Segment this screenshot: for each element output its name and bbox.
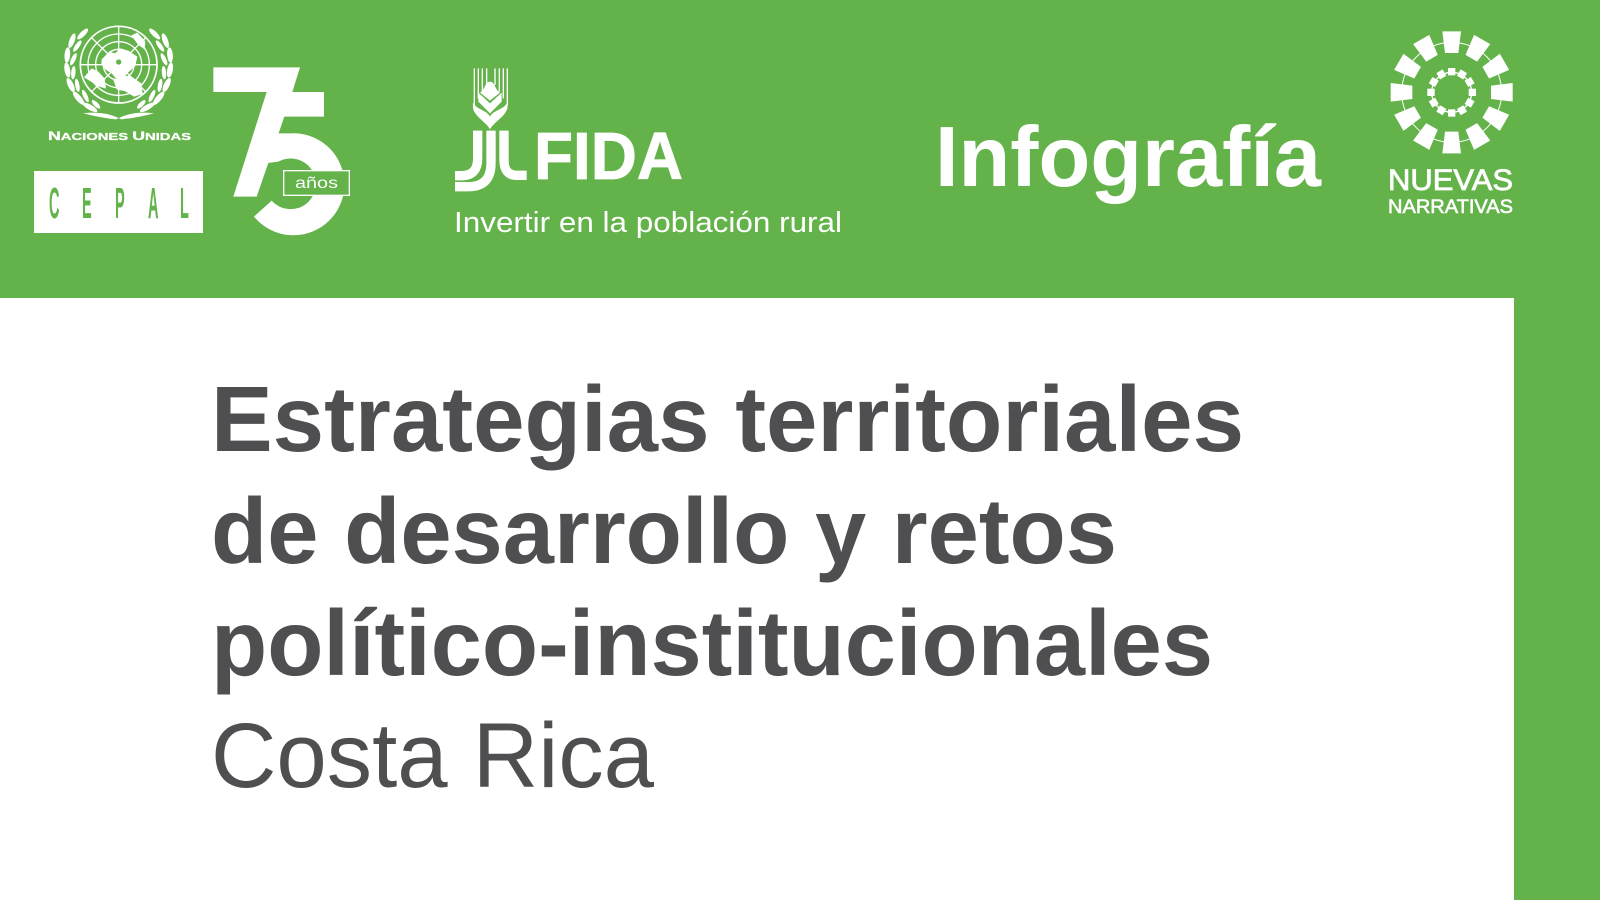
icon: numeral five bowl bbox=[254, 133, 344, 235]
icon: left olive branch bbox=[63, 27, 102, 114]
icon: JJL strokes bbox=[455, 131, 527, 187]
logo: FIDA bbox=[454, 68, 842, 239]
icon: wreath ribbon bbox=[83, 113, 154, 123]
text: NARRATIVAS: NARRATIVAS bbox=[1388, 196, 1513, 218]
text: NUEVAS: NUEVAS bbox=[1388, 164, 1513, 197]
logo: CEPAL bbox=[34, 171, 203, 233]
icon: wheat chevrons bbox=[473, 93, 508, 129]
text: años: años bbox=[295, 175, 338, 192]
title block bbox=[211, 367, 1244, 807]
subtitle: country: Costa Rica bbox=[211, 705, 655, 807]
icon: Nuevas Narrativas ring bbox=[1391, 31, 1513, 153]
label box: años bbox=[284, 171, 349, 195]
icon: wheat awns bbox=[474, 68, 507, 105]
title line 1: Estrategias territoriales bbox=[211, 367, 1244, 471]
icon: world continents bbox=[84, 33, 145, 97]
icon: globe rings bbox=[80, 26, 157, 103]
logo: Nuevas Narrativas bbox=[1388, 31, 1513, 218]
heading: Infografía: Infografía bbox=[935, 110, 1322, 205]
text: tagline: Invertir en la población rural bbox=[454, 207, 842, 239]
title line 3: político-institucionales bbox=[211, 591, 1213, 695]
icon: wheat and JJL mark bbox=[455, 68, 527, 187]
icon: wheat grain bbox=[480, 82, 500, 101]
logo: 75 años bbox=[213, 67, 349, 235]
text: FIDA: FIDA bbox=[534, 119, 683, 194]
text: Naciones Unidas: N ACIONES U NIDAS bbox=[48, 129, 191, 143]
logo: Naciones Unidas emblem bbox=[63, 26, 174, 123]
icon: globe centre bbox=[116, 59, 121, 65]
icon: right olive branch bbox=[136, 27, 174, 114]
text: CEPAL: CEPAL bbox=[49, 178, 189, 227]
panel: white title area bbox=[0, 298, 1514, 900]
icon: numeral seven and five top bbox=[213, 67, 324, 197]
title line 2: de desarrollo y retos bbox=[211, 479, 1117, 583]
panel: CEPAL box bbox=[34, 171, 203, 233]
